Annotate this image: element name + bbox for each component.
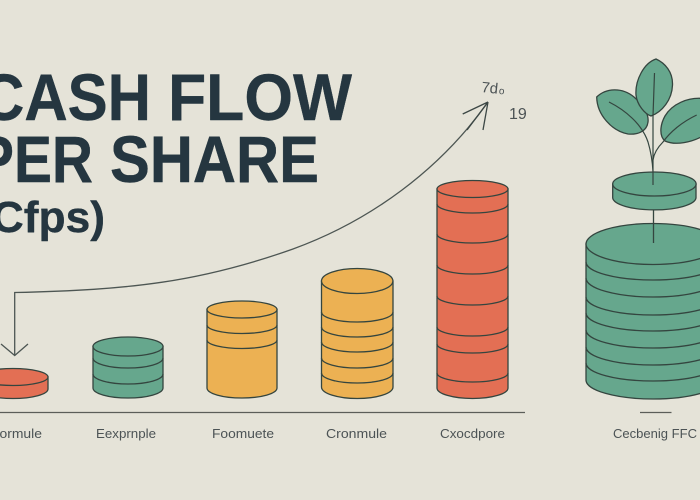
cylinder: large green stack: [586, 224, 700, 399]
cylinder: green: [93, 337, 163, 398]
title: FLOW: [168, 60, 353, 134]
plant stem link: [652, 210, 654, 243]
category labels: Cxocdpore: [440, 426, 505, 441]
small dash above caption: [640, 412, 672, 414]
top leaf: [636, 59, 673, 116]
arrow annotation: [481, 79, 527, 123]
plant: [597, 59, 700, 185]
cylinder: red tall: [437, 180, 508, 398]
right leaf: [661, 98, 700, 143]
category labels: Cronmule: [326, 426, 387, 441]
category labels: [0, 426, 697, 441]
category labels: Foomuete: [212, 426, 274, 441]
arrow annotation: 19: [509, 106, 527, 123]
category labels: Cecbenig FFC: [613, 426, 697, 441]
cylinder: yellow short: [207, 301, 277, 398]
category labels: Eexprnple: [96, 426, 156, 441]
upper green disc: [613, 172, 696, 210]
stems and leaf veins: [609, 73, 697, 185]
title: SHARE: [110, 122, 319, 196]
title: [0, 60, 353, 242]
axis line: [0, 412, 525, 414]
cylinder: yellow tall: [322, 268, 393, 399]
cylinder: red small: [0, 368, 48, 398]
growth arrow: [1, 102, 488, 356]
left leaf: [597, 90, 648, 134]
arrow annotation: 7do: [481, 79, 506, 98]
